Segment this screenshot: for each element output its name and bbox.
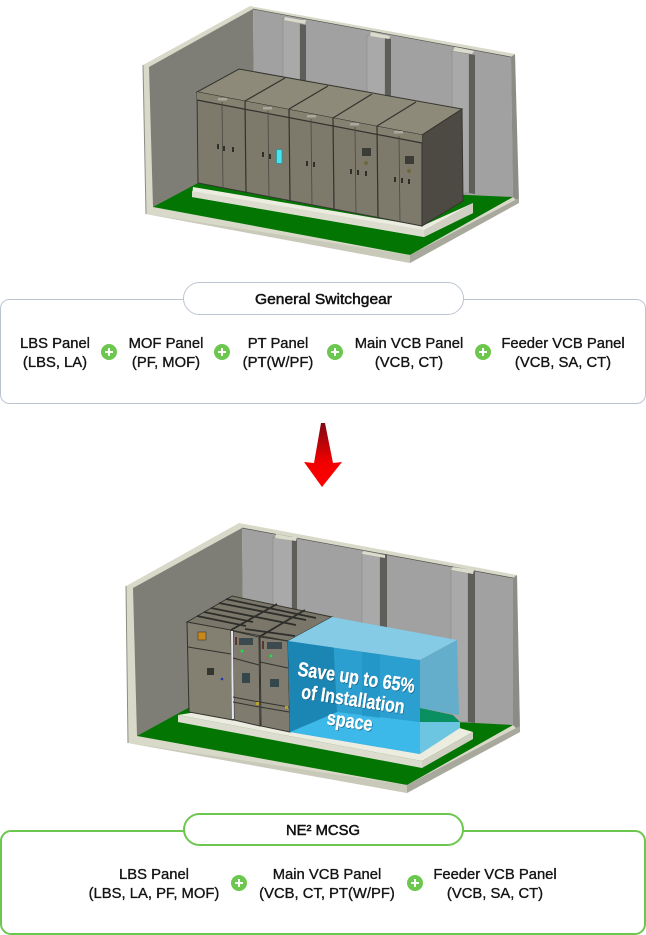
item: MOF Panel: MOF Panel: [129, 336, 203, 352]
item: Feeder VCB Panel: [501, 336, 625, 371]
icon: plus: [475, 344, 491, 360]
item: Main VCB Panel: [259, 867, 395, 902]
item: Main VCB Panel: Main VCB Panel: [355, 336, 463, 352]
item: Main VCB Panel: [355, 336, 463, 371]
item: LBS Panel: (LBS, LA): [23, 355, 87, 371]
panel: NE² MCSG composition: [1, 814, 645, 934]
item: LBS Panel: (LBS, LA, PF, MOF): [89, 886, 219, 902]
panel: general switchgear composition: [0, 282, 646, 404]
item: Feeder VCB Panel: (VCB, SA, CT): [515, 355, 611, 371]
heading pill: General Switchgear: General Switchgear: [255, 292, 392, 308]
callout: save up to 65% of installation space: space: [326, 708, 375, 737]
icon: plus: [407, 875, 423, 891]
concrete base: [178, 690, 473, 768]
wall columns: [273, 534, 475, 723]
item: MOF Panel: (PF, MOF): [132, 355, 200, 371]
item: Feeder VCB Panel: (VCB, SA, CT): [447, 886, 543, 902]
callout: save up to 65% of installation space: Save up to 65%: [297, 660, 417, 699]
room shell: walls and floor: [143, 6, 519, 263]
indicator light: [276, 150, 282, 164]
item: LBS Panel: [20, 336, 90, 371]
heading pill: NE² MCSG: [184, 814, 463, 845]
callout: save up to 65% of installation space: Save up to 65%: [296, 659, 416, 698]
callout: save up to 65% of installation space: [290, 659, 417, 742]
room shell: walls and floor: [126, 523, 520, 793]
icon: plus: [327, 344, 343, 360]
callout: save up to 65% of installation space: of Installation: [300, 681, 406, 719]
item: LBS Panel: [89, 867, 219, 902]
switchgear units: [187, 596, 332, 732]
item: MOF Panel: [129, 336, 203, 371]
callout: save up to 65% of installation space: space: [325, 707, 374, 736]
icon: plus: [214, 344, 230, 360]
saved-space volume: [288, 617, 460, 754]
heading pill: NE² MCSG: NE² MCSG: [286, 823, 360, 839]
concrete base: [192, 187, 473, 237]
item: Main VCB Panel: Main VCB Panel: [273, 867, 381, 883]
arrow: transition downward: [304, 423, 342, 487]
wall columns: [283, 17, 475, 200]
icon: plus: [231, 875, 247, 891]
icon: plus: [101, 344, 117, 360]
item: Feeder VCB Panel: Feeder VCB Panel: [501, 336, 625, 352]
illustration: NE² MCSG room: [126, 523, 520, 793]
item: Main VCB Panel: (VCB, CT, PT(W/PF): [259, 886, 395, 902]
illustration: general switchgear room: [143, 6, 519, 263]
heading pill: General Switchgear: [184, 282, 464, 314]
item: Feeder VCB Panel: Feeder VCB Panel: [433, 867, 557, 883]
callout: save up to 65% of installation space: of Installation: [301, 682, 407, 719]
switchgear cabinet: [197, 69, 463, 226]
item: PT Panel: (PT(W/PF): [243, 355, 313, 371]
item: LBS Panel: LBS Panel: [20, 336, 90, 352]
item: PT Panel: PT Panel: [248, 336, 308, 352]
item: Feeder VCB Panel: [433, 867, 557, 902]
item: LBS Panel: LBS Panel: [119, 867, 189, 883]
item: Main VCB Panel: (VCB, CT): [375, 355, 443, 371]
item: PT Panel: [243, 336, 313, 371]
